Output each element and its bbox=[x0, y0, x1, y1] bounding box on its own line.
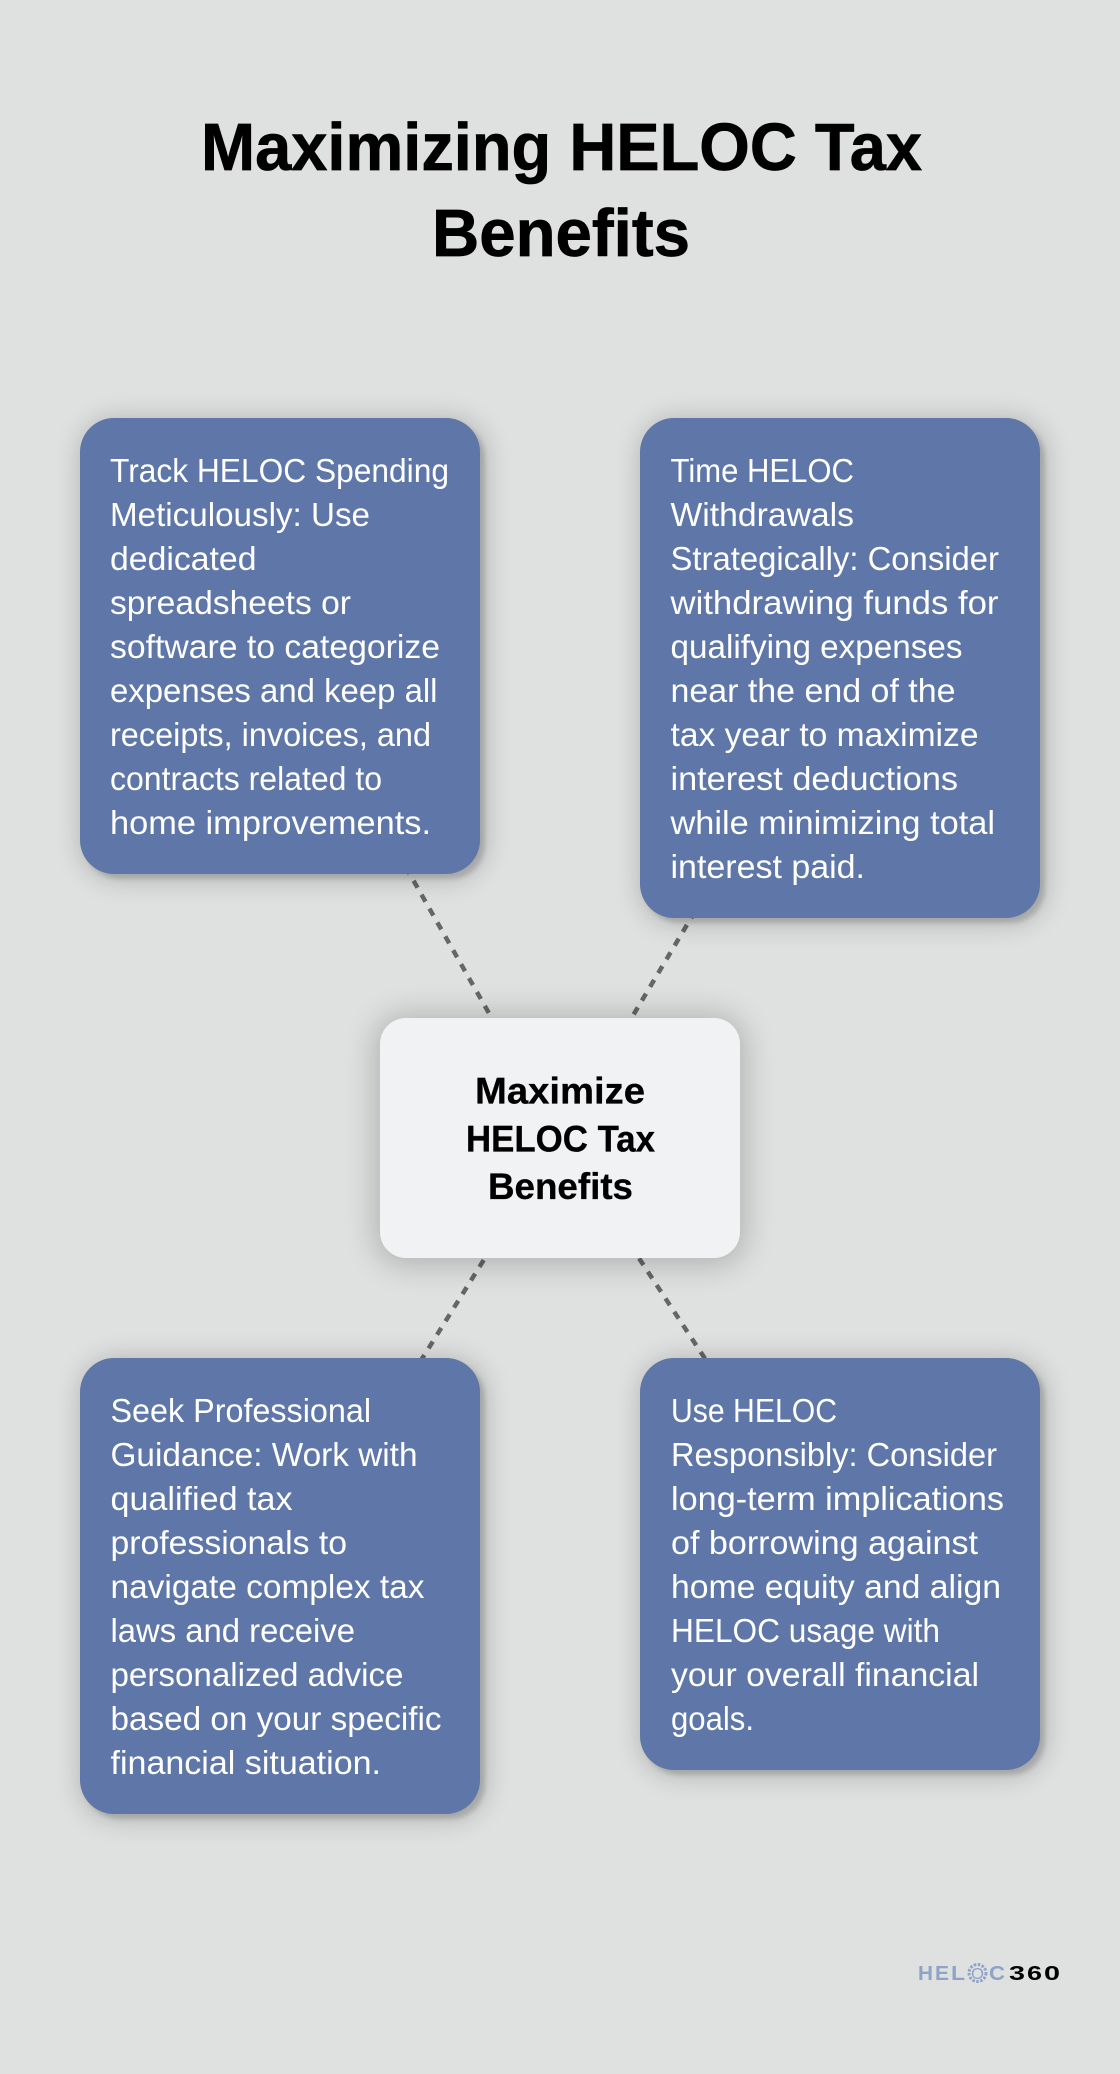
text: time HELOC withdrawals: qualifying expenses bbox=[670, 628, 962, 665]
logo: HELOC360 bbox=[918, 1963, 1060, 1985]
text: use HELOC responsibly: of borrowing against bbox=[671, 1524, 978, 1561]
text: time HELOC withdrawals: withdrawing funds for bbox=[669, 584, 999, 621]
logo: HELOC360: O bbox=[971, 1966, 984, 1983]
text: time HELOC withdrawals bbox=[669, 452, 999, 885]
center box: maximize HELOC tax benefits bbox=[380, 1018, 740, 1258]
text: track HELOC spending: spreadsheets or bbox=[110, 584, 351, 621]
panel: use HELOC responsibly bbox=[640, 1358, 1040, 1770]
text: seek professional guidance: based on your specific bbox=[110, 1700, 442, 1737]
text: use HELOC responsibly: home equity and align bbox=[671, 1568, 1001, 1605]
text: track HELOC spending: Track HELOC Spending bbox=[110, 452, 449, 489]
text: time HELOC withdrawals: Strategically: Consider bbox=[670, 540, 999, 577]
text: center heading: Benefits bbox=[488, 1166, 633, 1207]
logo: HELOC360: 3 bbox=[1009, 1963, 1025, 1985]
text: track HELOC spending bbox=[110, 452, 449, 841]
title: Maximizing HELOC Tax bbox=[201, 111, 922, 185]
logo: HELOC360: 0 bbox=[1044, 1963, 1060, 1985]
text: time HELOC withdrawals: interest paid. bbox=[670, 848, 865, 885]
text: track HELOC spending: receipts, invoices, and bbox=[110, 716, 431, 753]
text: time HELOC withdrawals: tax year to maximize bbox=[670, 716, 978, 753]
text: use HELOC responsibly: goals. bbox=[671, 1700, 754, 1737]
text: seek professional guidance: navigate complex tax bbox=[110, 1568, 425, 1605]
text: time HELOC withdrawals: Time HELOC bbox=[670, 452, 854, 489]
logo: HELOC360: L bbox=[951, 1963, 965, 1985]
title: Benefits bbox=[432, 197, 690, 271]
text: track HELOC spending: Meticulously: Use bbox=[110, 496, 370, 533]
text: use HELOC responsibly: Use HELOC bbox=[671, 1392, 837, 1429]
text: seek professional guidance bbox=[110, 1392, 442, 1781]
text: track HELOC spending: contracts related to bbox=[110, 760, 382, 797]
text: center heading bbox=[466, 1070, 655, 1207]
text: time HELOC withdrawals: while minimizing total bbox=[669, 804, 995, 841]
text: seek professional guidance: laws and receive bbox=[110, 1612, 355, 1649]
text: time HELOC withdrawals: near the end of the bbox=[670, 672, 956, 709]
text: seek professional guidance: qualified tax bbox=[110, 1480, 293, 1517]
text: seek professional guidance: Guidance: Work with bbox=[110, 1436, 418, 1473]
text: seek professional guidance: personalized advice bbox=[110, 1656, 404, 1693]
text: track HELOC spending: software to categorize bbox=[110, 628, 440, 665]
text: use HELOC responsibly bbox=[671, 1392, 1004, 1737]
logo: HELOC360: 6 bbox=[1027, 1963, 1042, 1985]
panel: track HELOC spending bbox=[80, 418, 480, 874]
text: use HELOC responsibly: Responsibly: Consider bbox=[671, 1436, 997, 1473]
text: use HELOC responsibly: long-term implications bbox=[671, 1480, 1004, 1517]
text: use HELOC responsibly: HELOC usage with bbox=[671, 1612, 940, 1649]
text: center heading: HELOC Tax bbox=[466, 1118, 655, 1160]
text: use HELOC responsibly: your overall financial bbox=[671, 1656, 979, 1693]
text: seek professional guidance: Seek Professional bbox=[110, 1392, 371, 1429]
text: track HELOC spending: expenses and keep all bbox=[110, 672, 438, 709]
panel: time HELOC withdrawals bbox=[640, 418, 1040, 918]
text: seek professional guidance: financial situation. bbox=[110, 1744, 381, 1781]
text: track HELOC spending: home improvements. bbox=[110, 804, 431, 841]
text: time HELOC withdrawals: interest deductions bbox=[670, 760, 958, 797]
text: seek professional guidance: professionals to bbox=[110, 1524, 347, 1561]
text: track HELOC spending: dedicated bbox=[110, 540, 256, 577]
panel: seek professional guidance bbox=[80, 1358, 480, 1814]
logo: HELOC360: E bbox=[935, 1963, 949, 1985]
text: time HELOC withdrawals: Withdrawals bbox=[670, 496, 854, 533]
text: center heading: Maximize bbox=[475, 1070, 645, 1112]
title bbox=[201, 111, 922, 271]
logo: HELOC360: C bbox=[989, 1963, 1005, 1985]
logo: HELOC360: H bbox=[918, 1963, 933, 1985]
